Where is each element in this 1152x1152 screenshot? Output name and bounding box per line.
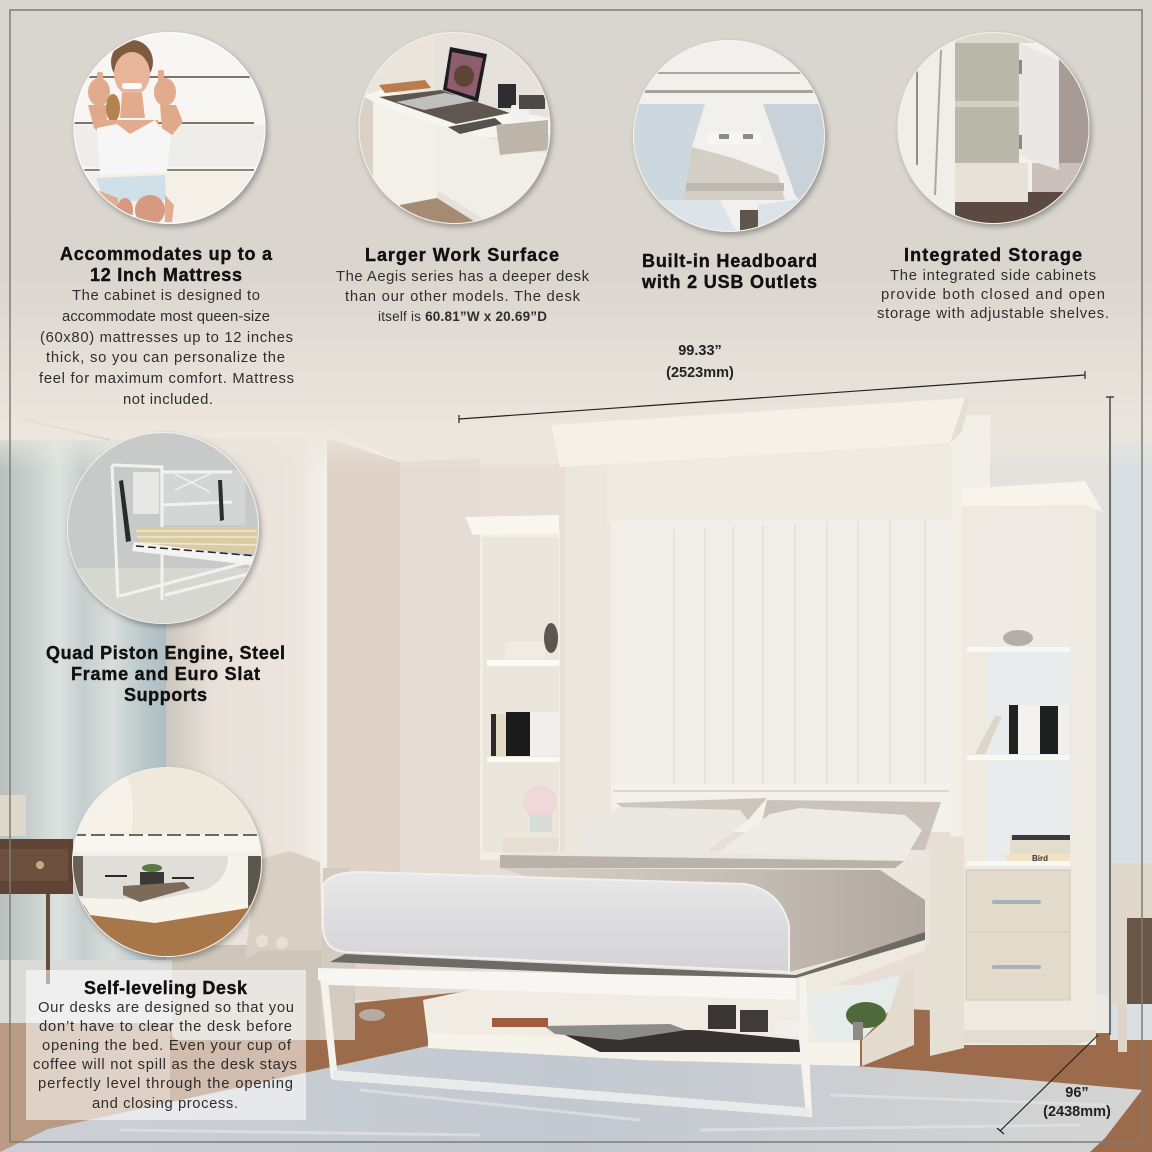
panel: piston engine text: Quad Piston Engine, Steel (46, 643, 285, 663)
panel: mattress feature text (39, 244, 294, 408)
panel: self-leveling desk callout: opening the bed. Even your cup of (42, 1038, 292, 1054)
panel: self-leveling desk callout: Self-leveling Desk (84, 978, 248, 998)
panel: integrated storage text (877, 245, 1109, 322)
folding bed frame and legs (318, 940, 925, 1117)
panel: mattress feature text: 12 Inch Mattress (90, 265, 242, 285)
height dimension line (1106, 397, 1114, 1035)
panel: mattress feature text: Accommodates up to a (60, 244, 273, 264)
panel: USB headboard text: Built-in Headboard (642, 251, 817, 271)
panel: self-leveling desk callout: perfectly level through the opening (38, 1076, 293, 1092)
armchair with throw blanket (172, 851, 385, 1040)
circle: integrated storage cabinet (895, 30, 1091, 230)
bed with pillows and bedding (323, 798, 941, 982)
panel: self-leveling desk callout: Our desks are designed so that you (38, 1000, 294, 1016)
panel: integrated storage text: provide both closed and open (881, 287, 1105, 303)
panel: work surface text: Larger Work Surface (365, 245, 559, 265)
room photo background (0, 300, 1152, 1152)
panel: mattress feature text: (60x80) mattresses up to 12 inches (40, 330, 293, 346)
panel: integrated storage text: The integrated side cabinets (890, 268, 1096, 284)
panel: integrated storage text: storage with adjustable shelves. (877, 306, 1109, 322)
panel: work surface text: than our other models. The desk (345, 289, 581, 305)
right side table (1112, 863, 1152, 1052)
panel: integrated storage text: Integrated Storage (904, 245, 1082, 265)
width dimension line (459, 371, 1085, 423)
panel: mattress feature text: thick, so you can personalize the (46, 350, 285, 366)
main wall bed cabinet (551, 398, 990, 865)
under-bed desk (423, 968, 914, 1066)
circle: woman on mattress (70, 30, 270, 230)
panel: self-leveling desk callout: and closing process. (92, 1096, 238, 1112)
left bookcase (465, 515, 560, 860)
circle: desk with laptop (355, 30, 555, 230)
panel: piston engine text: Supports (124, 685, 207, 705)
depth dimension label: (2438mm) (1043, 1104, 1111, 1120)
panel: piston engine text: Frame and Euro Slat (71, 664, 260, 684)
panel: mattress feature text: The cabinet is designed to (72, 288, 260, 304)
circle: self-leveling desk (70, 765, 265, 965)
right bookcase with drawers: Bird (1032, 854, 1048, 863)
panel: self-leveling desk callout: coffee will not spill as the desk stays (33, 1057, 297, 1073)
depth dimension label: 96” (1065, 1085, 1089, 1101)
left writing desk (0, 795, 73, 984)
depth dimension line (997, 1035, 1098, 1134)
panel: work surface text: The Aegis series has a deeper desk (336, 269, 590, 285)
panel: self-leveling desk callout: don’t have to clear the desk before (39, 1019, 292, 1035)
right bookcase with drawers (929, 481, 1103, 1056)
circle: USB outlets in headboard (630, 38, 830, 238)
depth dimension label (1043, 1085, 1111, 1120)
panel: USB headboard text (641, 251, 817, 292)
panel: self-leveling desk callout (26, 970, 306, 1120)
panel: USB headboard text: with 2 USB Outlets (641, 272, 817, 292)
width dimension label: (2523mm) (666, 365, 734, 381)
panel: work surface text (336, 245, 590, 324)
panel: piston engine text (46, 643, 285, 705)
panel: mattress feature text: accommodate most queen-size (62, 309, 270, 325)
circle: quad piston steel frame (65, 430, 265, 630)
width dimension label: 99.33” (678, 343, 722, 359)
panel: mattress feature text: not included. (123, 392, 213, 408)
top beige fade (0, 0, 1152, 470)
width dimension label (666, 343, 734, 381)
panel: work surface text: itself is 60.81”W x 20.69”D (378, 309, 547, 324)
panel: mattress feature text: feel for maximum comfort. Mattress (39, 371, 294, 387)
